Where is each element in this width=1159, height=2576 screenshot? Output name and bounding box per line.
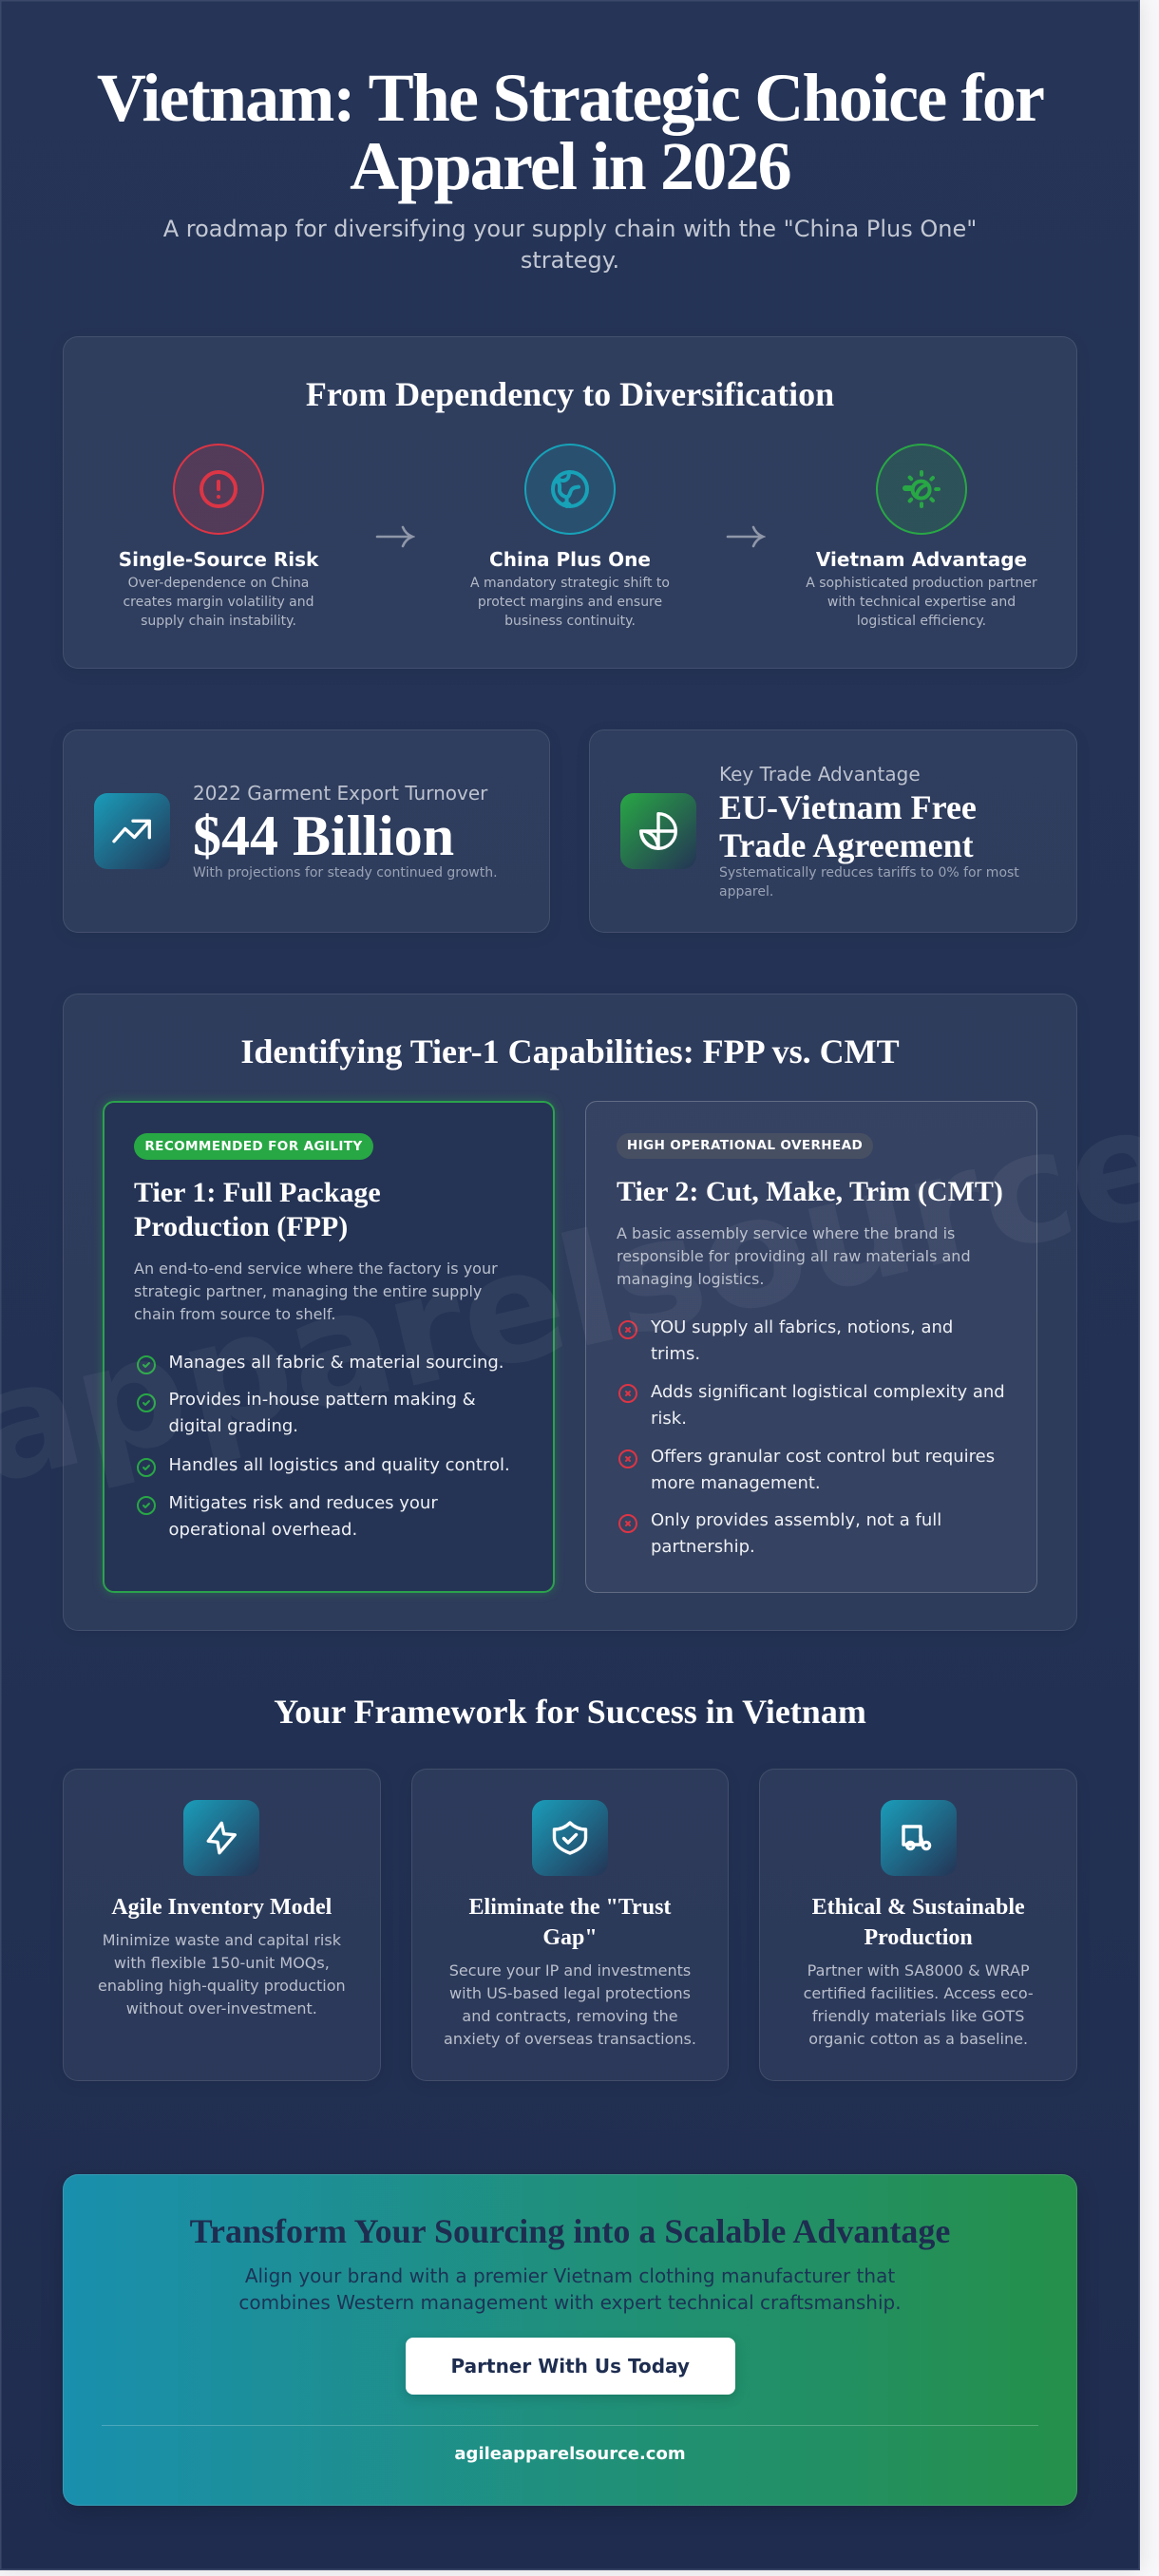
stat label: Key Trade Advantage: [719, 763, 921, 786]
card text: Minimize waste and capital risk: [103, 1930, 341, 1949]
step description: A mandatory strategic shift to: [470, 576, 670, 591]
card description: An end-to-end service where the factory is your: [134, 1260, 498, 1278]
step title: Single-Source Risk: [119, 548, 318, 571]
subtitle: [163, 216, 977, 274]
list item: [651, 1381, 1005, 1429]
panel: tier-1 capabilities: [63, 994, 1077, 1631]
card title: Agile Inventory Model: [111, 1895, 332, 1920]
icon: sun and leaf: [876, 444, 967, 535]
list item: [169, 1493, 438, 1540]
card text: [804, 1960, 1034, 2048]
icon: check: [137, 1496, 156, 1515]
card text: without over-investment.: [126, 1998, 317, 2017]
step description: with technical expertise and: [827, 595, 1016, 610]
list item: risk.: [651, 1408, 687, 1429]
card text: friendly materials like GOTS: [812, 2006, 1024, 2025]
button: Partner With Us Today: [451, 2355, 690, 2377]
card heading: Tier 2: Cut, Make, Trim (CMT): [617, 1176, 1003, 1206]
card title: Eliminate the "Trust: [469, 1895, 671, 1920]
step description: business continuity.: [504, 614, 636, 629]
icon: check: [137, 1458, 156, 1477]
list item: [651, 1510, 941, 1557]
panel: export turnover stat: [63, 729, 550, 933]
card text: enabling high-quality production: [98, 1976, 346, 1995]
list item: Mitigates risk and reduces your: [169, 1493, 438, 1513]
card text: with US-based legal protections: [449, 1983, 691, 2002]
list item: [651, 1447, 995, 1493]
icon: check: [137, 1355, 156, 1374]
stat note: apparel.: [719, 884, 773, 900]
card title: Ethical & Sustainable: [812, 1895, 1025, 1920]
list item: [169, 1390, 476, 1436]
icon: lightning: [183, 1800, 259, 1876]
list item: Offers granular cost control but requires: [651, 1447, 995, 1467]
list item: operational overhead.: [169, 1520, 357, 1540]
step description: [470, 576, 670, 629]
card text: [98, 1930, 346, 2017]
badge: [617, 1132, 873, 1159]
cta text: Align your brand with a premier Vietnam clothing manufacturer that: [245, 2264, 895, 2287]
step description: [123, 576, 314, 629]
icon: trending up: [94, 793, 170, 869]
badge: HIGH OPERATIONAL OVERHEAD: [627, 1138, 863, 1153]
stat note: [719, 865, 1019, 900]
step description: protect margins and ensure: [478, 595, 662, 610]
card description: responsible for providing all raw materials and: [617, 1247, 971, 1265]
title: Vietnam: The Strategic Choice for: [97, 60, 1043, 136]
list item: Provides in-house pattern making &: [169, 1390, 476, 1410]
heading: Identifying Tier-1 Capabilities: FPP vs. CMT: [240, 1032, 900, 1070]
card description: [617, 1224, 971, 1288]
step description: Over-dependence on China: [128, 576, 309, 591]
stat note: Systematically reduces tariffs to 0% for most: [719, 865, 1019, 881]
panel: call to action: [63, 2174, 1077, 2506]
step title: China Plus One: [489, 548, 651, 571]
stat value: [719, 788, 977, 864]
subtitle: strategy.: [521, 247, 619, 274]
card title: [469, 1895, 671, 1950]
card text: organic cotton as a baseline.: [808, 2029, 1028, 2048]
card: eliminate the trust gap: [411, 1769, 729, 2081]
stat value: EU-Vietnam Free: [719, 788, 977, 826]
icon: check: [137, 1393, 156, 1412]
website url: agileapparelsource.com: [454, 2444, 686, 2464]
list item: more management.: [651, 1473, 821, 1493]
step description: logistical efficiency.: [857, 614, 986, 629]
card: tier 1 FPP: [103, 1101, 555, 1593]
card text: Partner with SA8000 & WRAP: [808, 1960, 1030, 1979]
step description: [806, 576, 1037, 629]
list item: Manages all fabric & material sourcing.: [169, 1353, 504, 1373]
x list: [618, 1317, 1005, 1557]
button: [405, 2338, 735, 2395]
badge: [134, 1133, 373, 1160]
panel: trade agreement stat: [589, 729, 1077, 933]
panel: from dependency to diversification: [63, 336, 1077, 669]
arrow: [376, 526, 415, 547]
cta text: [238, 2264, 902, 2314]
section heading: framework: Your Framework for Success in Vietnam: [274, 1693, 866, 1731]
stat note: With projections for steady continued growth.: [193, 865, 498, 881]
card description: [134, 1260, 498, 1323]
stat value: $44 Billion: [193, 805, 454, 867]
card text: anxiety of overseas transactions.: [444, 2029, 696, 2048]
list item: trims.: [651, 1344, 700, 1364]
icon: pie and leaf: [620, 793, 696, 869]
card text: certified facilities. Access eco-: [804, 1983, 1034, 2002]
heading: From Dependency to Diversification: [306, 375, 834, 413]
card: tier 2 CMT: [585, 1101, 1037, 1593]
step description: A sophisticated production partner: [806, 576, 1037, 591]
card description: managing logistics.: [617, 1270, 764, 1288]
list item: YOU supply all fabrics, notions, and: [651, 1317, 953, 1337]
title: [97, 60, 1043, 204]
icon: cross: [618, 1384, 637, 1403]
arrow: [726, 526, 766, 547]
step description: supply chain instability.: [141, 614, 296, 629]
icon: alert circle: [173, 444, 264, 535]
card: agile inventory model: [63, 1769, 381, 2081]
subtitle: A roadmap for diversifying your supply chain with the "China Plus One": [163, 216, 977, 242]
step: vietnam advantage: [806, 444, 1037, 629]
list item: Adds significant logistical complexity and: [651, 1381, 1005, 1402]
icon: cross: [618, 1514, 637, 1533]
icon: shield check: [532, 1800, 608, 1876]
stat value: Trade Agreement: [719, 826, 974, 864]
card: ethical and sustainable production: [759, 1769, 1077, 2081]
card text: [444, 1960, 696, 2048]
card text: Secure your IP and investments: [449, 1960, 691, 1979]
list item: Handles all logistics and quality control.: [169, 1455, 510, 1475]
list item: Only provides assembly, not a full: [651, 1510, 941, 1530]
card title: Gap": [542, 1925, 598, 1950]
card heading: Production (FPP): [134, 1211, 348, 1242]
cta heading: Transform Your Sourcing into a Scalable Advantage: [190, 2212, 950, 2250]
icon: globe: [524, 444, 616, 535]
card text: and contracts, removing the: [462, 2006, 678, 2025]
list item: [651, 1317, 953, 1364]
title: Apparel in 2026: [350, 128, 790, 204]
list item: digital grading.: [169, 1416, 298, 1436]
card text: with flexible 150-unit MOQs,: [114, 1953, 330, 1972]
cta text: combines Western management with expert technical craftsmanship.: [238, 2291, 902, 2314]
icon: truck: [881, 1800, 957, 1876]
icon: cross: [618, 1449, 637, 1468]
check list: [137, 1353, 510, 1540]
card title: Production: [864, 1925, 973, 1950]
step: single-source risk: [119, 444, 319, 629]
icon: cross: [618, 1320, 637, 1339]
card heading: [134, 1177, 381, 1242]
card heading: Tier 1: Full Package: [134, 1177, 381, 1208]
list item: partnership.: [651, 1537, 755, 1557]
card description: strategic partner, managing the entire supply: [134, 1282, 482, 1300]
stat label: 2022 Garment Export Turnover: [193, 782, 487, 805]
badge: RECOMMENDED FOR AGILITY: [144, 1139, 363, 1154]
step description: creates margin volatility and: [123, 595, 314, 610]
card description: chain from source to shelf.: [134, 1305, 335, 1323]
step title: Vietnam Advantage: [816, 548, 1027, 571]
step: china plus one: [470, 444, 670, 629]
card title: [812, 1895, 1025, 1950]
card description: A basic assembly service where the brand is: [617, 1224, 955, 1242]
